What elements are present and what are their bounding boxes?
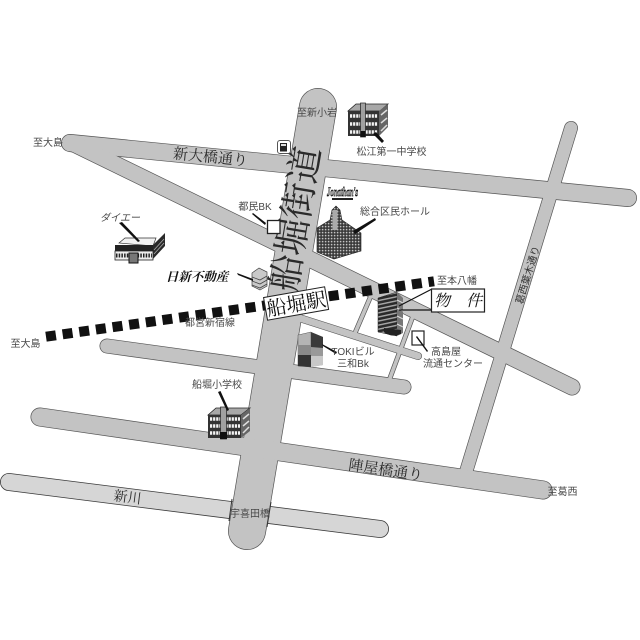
building: ダイエー bbox=[115, 222, 165, 263]
building: TOKIビル 三和Bk bbox=[298, 332, 337, 367]
building: 総合区民ホール bbox=[317, 206, 376, 259]
label: 日新不動産: 日新不動産 bbox=[166, 270, 230, 284]
label: 総合区民ホール: 総合区民ホール bbox=[360, 205, 430, 218]
building: 船堀小学校 bbox=[208, 391, 250, 439]
label: 都営新宿線: 都営新宿線 bbox=[185, 316, 235, 329]
bridge: 宇喜田橋 bbox=[229, 499, 271, 527]
label: ダイエー: ダイエー bbox=[100, 212, 141, 224]
road name: 船堀街道: 船堀街道 bbox=[263, 144, 329, 294]
icon: gas station bbox=[278, 140, 290, 154]
label: 至大島 north: 至大島 bbox=[33, 136, 63, 149]
label: 松江第一中学校: 松江第一中学校 bbox=[356, 145, 426, 158]
river name: 新川: 新川 bbox=[113, 487, 142, 508]
label: 至大島 west: 至大島 bbox=[10, 337, 40, 350]
label: 高島屋 流通センター: 高島屋 bbox=[431, 345, 461, 358]
label: TOKIビル 三和Bk: 三和Bk bbox=[337, 358, 370, 370]
railway: 都営新宿線 bbox=[46, 281, 434, 337]
label: 至新小岩: 至新小岩 bbox=[297, 106, 337, 119]
road name: 新大橋通り: 新大橋通り bbox=[172, 144, 249, 170]
building: 松江第一中学校 bbox=[348, 103, 388, 143]
label: 至葛西: 至葛西 bbox=[548, 485, 578, 498]
building: 日新不動産 bbox=[237, 268, 267, 290]
road name: 陣屋橋通り: 陣屋橋通り bbox=[347, 457, 424, 484]
label: 高島屋 流通センター bbox=[423, 345, 483, 370]
label: 都民BK: 都民BK bbox=[238, 201, 272, 213]
marker: 高島屋 bbox=[412, 331, 428, 352]
property callout bbox=[399, 289, 484, 312]
logo: Jonathan's: Jonathan's bbox=[326, 184, 358, 199]
property callout: 物 件 bbox=[434, 292, 484, 310]
river: 新川 bbox=[9, 482, 380, 529]
road name: side street: 葛西葉木通り bbox=[513, 244, 543, 306]
label: 至本八幡: 至本八幡 bbox=[437, 274, 477, 287]
bridge: 宇喜田橋: 宇喜田橋 bbox=[230, 507, 270, 520]
property building bbox=[378, 292, 403, 336]
logo: Jonathan's bbox=[326, 184, 358, 200]
label: TOKIビル 三和Bk: TOKIビル bbox=[331, 346, 375, 358]
marker: 都民BK bbox=[252, 213, 280, 234]
station label: 船堀駅: 船堀駅 bbox=[265, 288, 328, 321]
road network bbox=[40, 107, 628, 531]
label: 船堀小学校: 船堀小学校 bbox=[192, 378, 242, 391]
label: TOKIビル 三和Bk bbox=[331, 346, 375, 370]
label: 高島屋 流通センター: 流通センター bbox=[423, 358, 483, 370]
